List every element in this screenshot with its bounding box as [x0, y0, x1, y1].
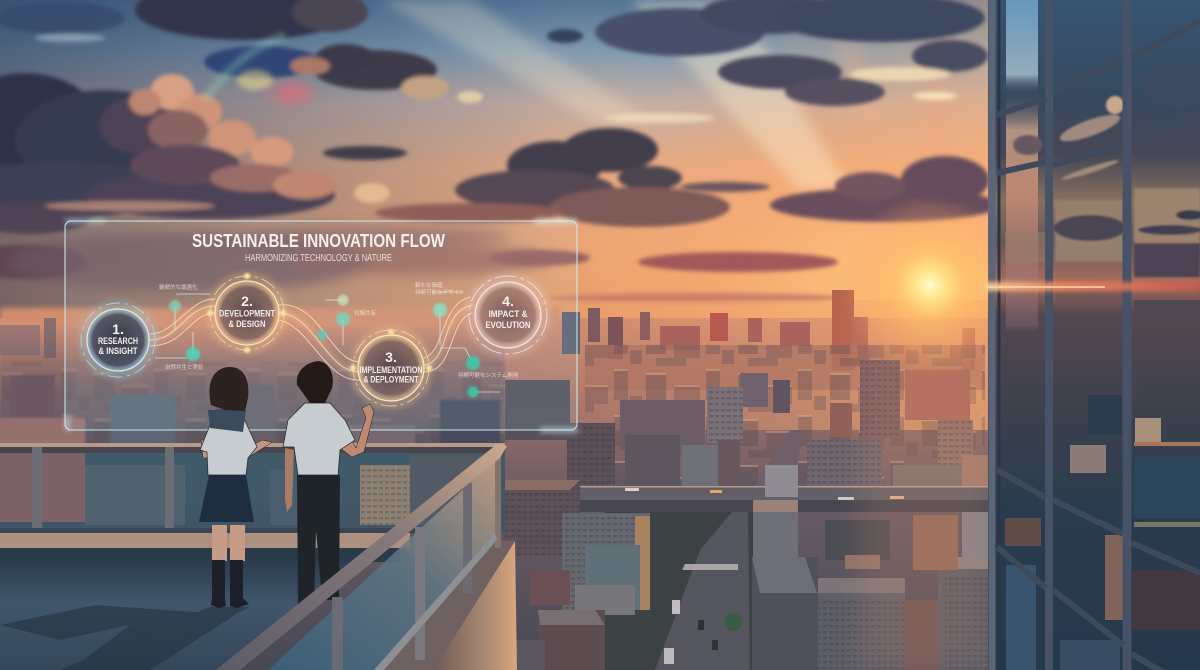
girl socks and shoes — [211, 560, 249, 608]
girl collar — [208, 410, 246, 432]
glass tower — [988, 0, 1200, 670]
step 4 circle — [464, 271, 552, 359]
window mullions — [992, 0, 1200, 670]
girl legs — [212, 525, 245, 561]
window reflections — [1005, 0, 1200, 670]
step 1 circle: 1. — [112, 321, 124, 337]
terrace ledge — [0, 528, 420, 562]
cloud: top left — [0, 0, 483, 103]
floor shadows — [0, 605, 250, 670]
step 4 circle: EVOLUTION — [486, 320, 531, 331]
clouds — [0, 0, 1000, 303]
step 1 circle: RESEARCH — [98, 336, 138, 347]
small annotations: 自然共生と実証 — [165, 363, 204, 371]
step 3 circle — [349, 326, 433, 410]
glass balustrade back — [0, 450, 505, 532]
sky background — [0, 0, 1200, 340]
mid-rise blocks — [505, 345, 990, 495]
step 3 circle: & DEPLOYMENT — [364, 374, 419, 386]
step 4 circle: IMPACT & — [488, 309, 528, 320]
horizontal lens streak — [985, 282, 1200, 291]
cloud: top right — [595, 0, 988, 192]
cloud: band behind panel — [10, 226, 550, 292]
flow connector waves — [150, 297, 472, 380]
diagonal posts — [332, 455, 501, 670]
boy left arm — [285, 448, 294, 512]
small annotations: 新たな価値 — [415, 281, 443, 289]
lower diagonal rail — [374, 533, 497, 670]
sun glow — [500, 85, 1200, 485]
diagonal glass — [268, 455, 500, 670]
step 2 circle: & DESIGN — [228, 319, 266, 330]
step 2 circle: DEVELOPMENT — [219, 308, 275, 320]
step 3 circle: IMPLEMENTATION — [360, 365, 423, 376]
panel frame — [65, 221, 577, 430]
girl skirt — [199, 475, 254, 522]
lens flare — [205, 35, 322, 111]
balcony block — [378, 540, 517, 670]
floor — [0, 560, 370, 670]
step 2 circle — [206, 272, 288, 354]
road — [605, 512, 755, 670]
diagonal handrail — [216, 444, 507, 670]
terrace front with diagonal railing — [216, 444, 517, 670]
step 3 circle: 3. — [385, 349, 397, 365]
girl hair — [209, 367, 248, 411]
holographic panel — [65, 219, 578, 432]
distant city — [0, 290, 990, 670]
girl — [199, 367, 272, 608]
subtitle: HARMONIZING TECHNOLOGY & NATURE — [245, 253, 392, 264]
terrace back — [0, 443, 505, 670]
small annotations — [159, 281, 519, 379]
small annotations: 持続可能なデザイン — [415, 288, 465, 296]
light rays — [380, 0, 950, 190]
step 1 circle: & INSIGHT — [98, 346, 138, 357]
boy — [283, 361, 374, 610]
cloud: big left bank — [0, 73, 390, 279]
reflected buildings behind glass — [0, 450, 500, 525]
small annotations: 継続的な最適化 — [159, 283, 198, 291]
students — [199, 361, 374, 610]
title: SUSTAINABLE INNOVATION FLOW — [192, 231, 445, 251]
step 4 circle: 4. — [502, 293, 514, 309]
boy hair — [297, 361, 333, 403]
step 1 circle — [78, 300, 158, 380]
highway — [580, 486, 990, 512]
cloud: centre — [323, 29, 730, 227]
boy right arm — [340, 404, 374, 457]
back rail — [0, 443, 505, 542]
small teal nodes — [155, 292, 500, 398]
boy legs — [297, 475, 340, 610]
girl arms — [201, 440, 272, 458]
step 2 circle: 2. — [241, 293, 253, 309]
cloud: right — [490, 156, 1000, 303]
boy shirt — [283, 403, 355, 475]
girl shirt — [200, 410, 257, 475]
foreground buildings — [503, 465, 990, 670]
small annotations: 持続可能なシステム開発 — [458, 371, 519, 379]
small annotations: 知識共有 — [354, 309, 377, 317]
left haze city — [0, 335, 505, 448]
sun disc — [840, 195, 1020, 375]
skyline towers — [0, 290, 975, 370]
low sun wash over city — [860, 300, 990, 670]
panel corner glows — [65, 219, 578, 432]
